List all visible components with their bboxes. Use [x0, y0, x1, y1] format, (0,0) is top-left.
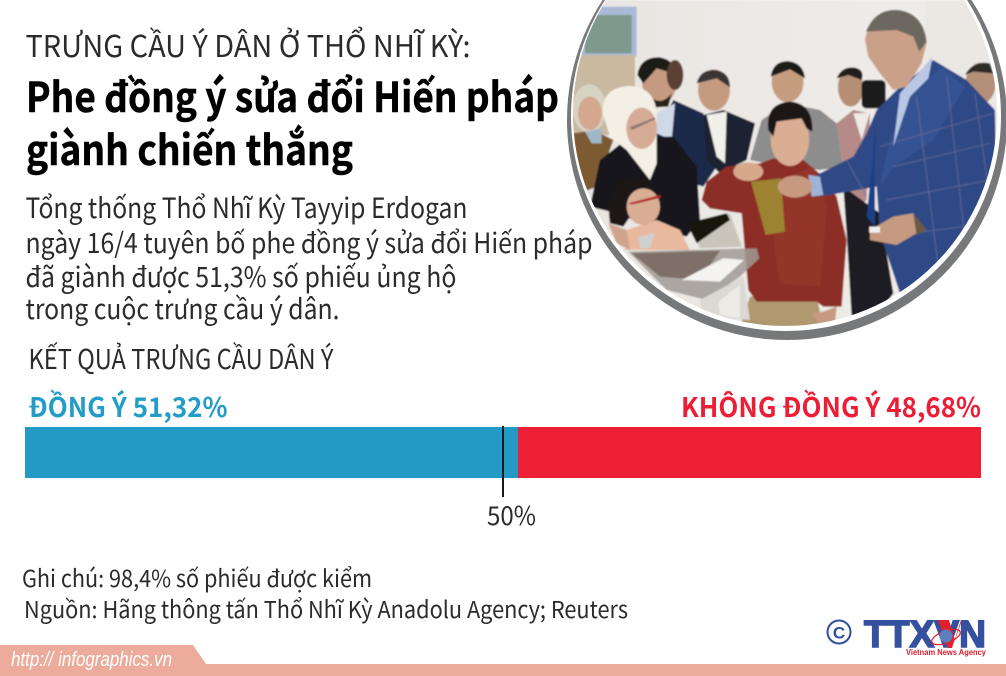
intro paragraph: đã giành được 51,3% số phiếu ủng hộ	[26, 256, 456, 296]
result bar chart	[25, 386, 981, 533]
intro paragraph: ngày 16/4 tuyên bố phe đồng ý sửa đổi Hiến pháp	[26, 222, 592, 262]
photo: referendum ballot	[560, 0, 1006, 340]
intro paragraph: trong cuộc trưng cầu ý dân.	[26, 288, 340, 328]
chart heading: KẾT QUẢ TRƯNG CẦU DÂN Ý	[28, 338, 334, 377]
Recep Tayyip Erdogan	[843, 187, 893, 317]
note: Ghi chú: 98,4% số phiếu được kiểm	[22, 560, 372, 594]
bag	[692, 213, 742, 248]
footer band	[0, 645, 1006, 676]
source: Nguồn: Hãng thông tấn Thổ Nhĩ Kỳ Anadolu Agency; Reuters	[24, 591, 628, 625]
bar: disagree segment	[518, 427, 981, 478]
main heading: Phe đồng ý sửa đổi Hiến pháp	[26, 64, 559, 124]
copyright icon: C	[833, 624, 845, 642]
Emine Erdogan	[590, 137, 700, 237]
ballot box	[628, 248, 759, 300]
main heading	[26, 64, 559, 177]
label: agree: ĐỒNG Ý 51,32%	[28, 386, 228, 425]
intro paragraph: Tổng thống Thổ Nhĩ Kỳ Tayyip Erdogan	[26, 187, 468, 227]
50 percent marker	[502, 426, 504, 497]
copyright icon	[828, 620, 850, 644]
back row	[653, 100, 717, 187]
main heading: giành chiến thắng	[26, 117, 353, 177]
intro paragraph	[26, 187, 592, 328]
website url: http:// infographics.vn	[11, 649, 172, 671]
boy	[740, 297, 823, 327]
50 percent label: 50%	[487, 496, 536, 533]
logo: TTXVN: Vietnam News Agency	[906, 647, 986, 657]
label: disagree: KHÔNG ĐỒNG Ý 48,68%	[681, 386, 981, 425]
title kicker: TRƯNG CẦU Ý DÂN Ở THỔ NHĨ KỲ:	[26, 22, 470, 66]
bar: agree segment	[25, 427, 518, 478]
logo: TTXVN: TTXVN	[864, 614, 986, 656]
girl	[625, 220, 690, 250]
left woman	[573, 130, 613, 193]
